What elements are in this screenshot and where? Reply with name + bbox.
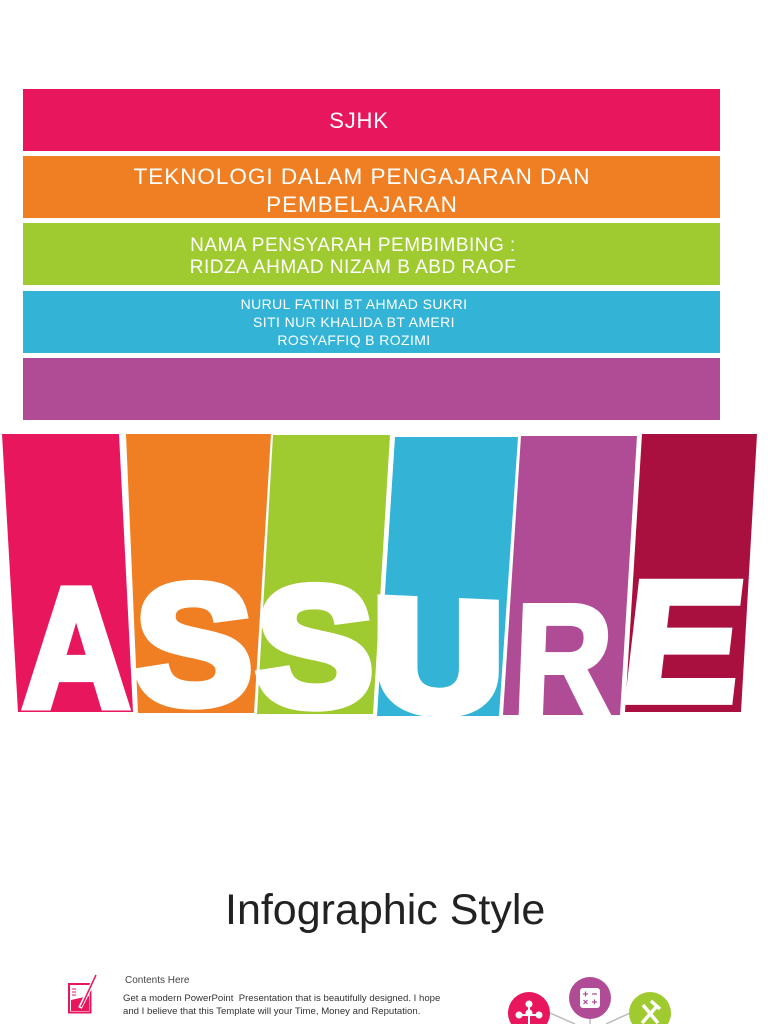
text: contents label: Contents Here: [125, 975, 189, 986]
panel: student names bar: [23, 291, 720, 353]
letter E: E: [613, 546, 754, 738]
strip: R: [503, 436, 637, 715]
icon: network node circle: [508, 992, 550, 1024]
panel: course title bar: [23, 156, 720, 218]
strip: U: [377, 437, 518, 716]
panel: course title bar: PEMBELAJARAN: [266, 192, 458, 217]
panel: lecturer bar: NAMA PENSYARAH PEMBIMBING :: [190, 235, 516, 256]
panel: SJHK header bar: [23, 89, 720, 151]
strip: second S: [257, 435, 390, 714]
panel: lecturer bar: RIDZA AHMAD NIZAM B ABD RAOF: [190, 257, 516, 278]
icon: calculator circle: [569, 977, 611, 1019]
heading: Infographic Style: Infographic Style: [225, 886, 545, 934]
text: contents description: [123, 993, 440, 1017]
panel: course title bar: TEKNOLOGI DALAM PENGAJARAN DAN: [134, 164, 590, 189]
letter S: S: [256, 552, 373, 741]
strip: S: [126, 434, 271, 713]
chart: ASSURE colored strips with letters: [2, 434, 757, 716]
panel: student names bar: SITI NUR KHALIDA BT AMERI: [253, 314, 455, 330]
panel: student names bar: ROSYAFFIQ B ROZIMI: [277, 332, 431, 348]
panel: SJHK header bar: SJHK: [329, 108, 389, 133]
letter R: R: [511, 572, 616, 747]
letter S: S: [135, 550, 252, 739]
text: contents description: Get a modern PowerPoint Presentation that is beautifully designed. I hope: [123, 993, 440, 1004]
strip: A: [2, 434, 133, 712]
icon: tools circle: [629, 992, 671, 1024]
panel: student names bar: NURUL FATINI BT AHMAD SUKRI: [241, 296, 467, 312]
letter A: A: [22, 553, 130, 745]
text: contents description: and I believe that this Template will your Time, Money and Reputation.: [123, 1006, 420, 1017]
panel: lecturer bar: [23, 223, 720, 285]
letters: ASSURE: [21, 578, 744, 716]
letter U: U: [374, 568, 503, 746]
panel: empty purple bar: [23, 358, 720, 420]
strip: E: [625, 434, 757, 712]
